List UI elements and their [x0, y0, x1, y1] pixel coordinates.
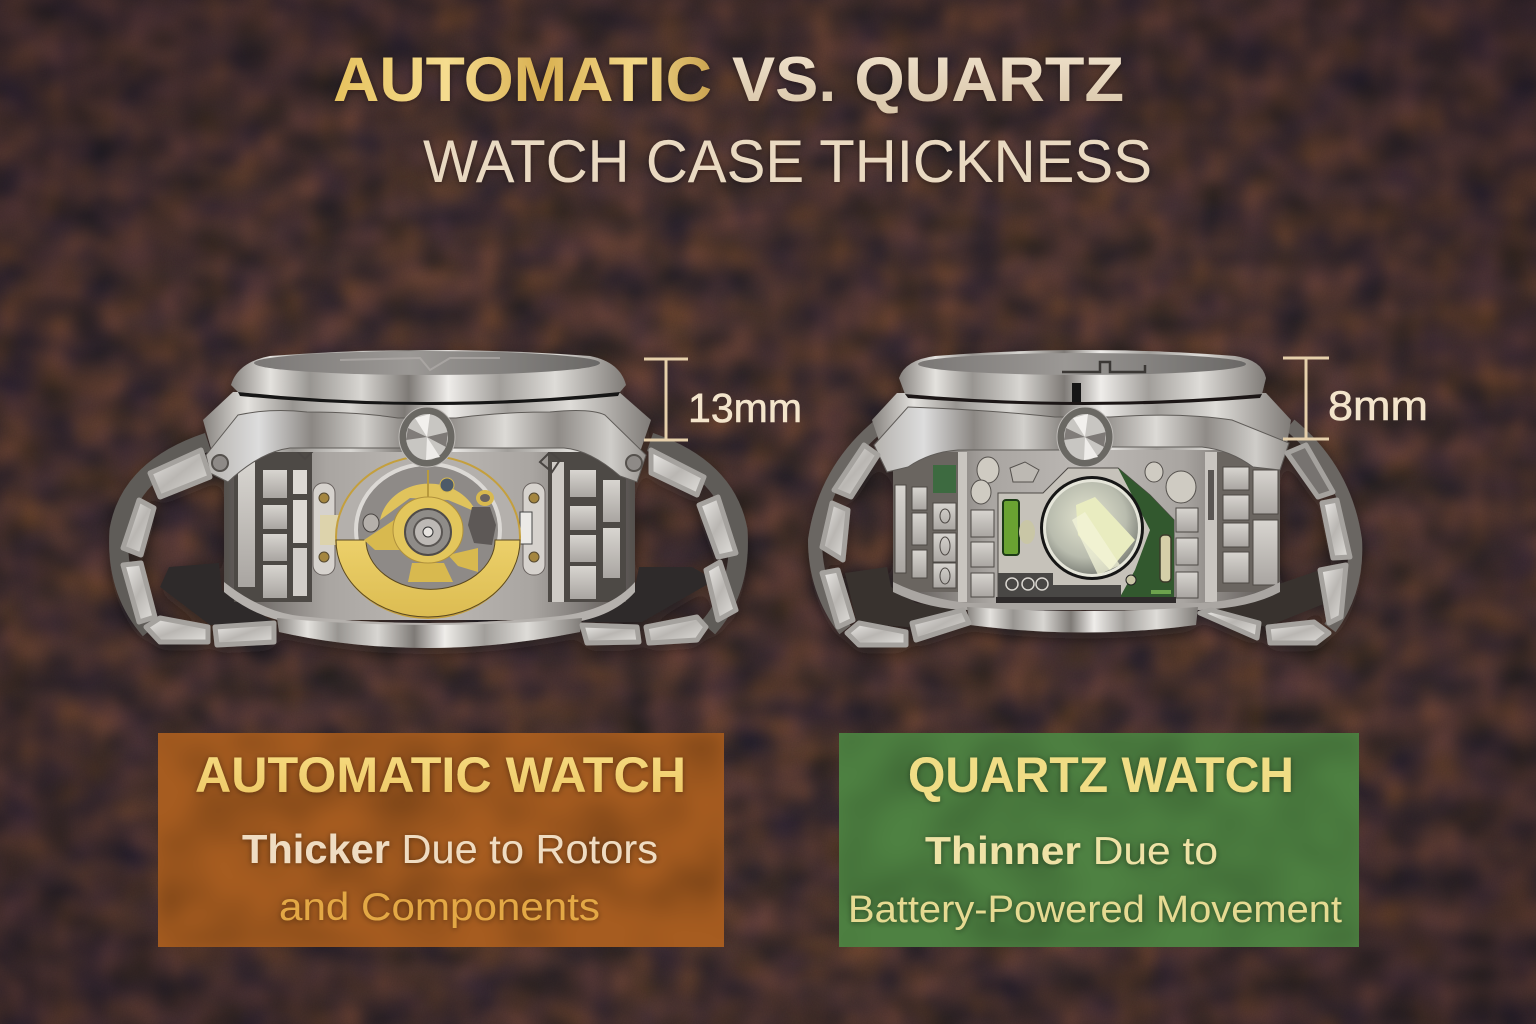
case body [224, 447, 635, 620]
central hub [393, 497, 463, 563]
right tiles [1176, 467, 1278, 598]
case base plate [277, 618, 582, 648]
small green board patch [933, 465, 956, 493]
lug bar [874, 407, 1289, 472]
illustration: automatic watch cutaway [119, 350, 738, 648]
label: 8mm: 8mm [1328, 382, 1428, 429]
title [333, 45, 1124, 115]
label: 13mm: 13mm [688, 385, 802, 431]
small capsule [1160, 535, 1171, 582]
panel: automatic watch [158, 733, 724, 947]
green capacitor [1003, 500, 1019, 555]
shoulder [203, 392, 651, 452]
gold rotor and automatic movement [336, 456, 520, 618]
subtitle: WATCH CASE THICKNESS [423, 128, 1152, 195]
vertical strips [958, 452, 1217, 602]
case base plate [967, 607, 1198, 632]
bracelet backing left [815, 425, 880, 630]
right column backing [548, 450, 626, 602]
left tile backing [893, 452, 958, 592]
right tile backing [1217, 452, 1280, 592]
dimension bracket: 13mm [644, 359, 688, 440]
bracelet backing left [119, 442, 208, 630]
panel: quartz watch [839, 733, 1359, 947]
bezel [899, 350, 1266, 405]
bracelet links right [582, 450, 736, 643]
crown [399, 407, 455, 467]
bridge plates with rivets [313, 483, 545, 575]
case back rim [893, 582, 1280, 610]
bracelet backing right [650, 442, 738, 628]
crown [1057, 407, 1113, 467]
bracelet links left [123, 450, 274, 645]
bracelet links left [822, 445, 969, 645]
title: AUTOMATIC [333, 45, 712, 115]
shoulder [872, 393, 1291, 450]
left tiles [895, 485, 994, 597]
upper components [971, 457, 1196, 504]
left columns [238, 443, 314, 598]
right columns [540, 452, 620, 602]
case body [893, 450, 1280, 607]
panel text: battery-powered movement: Battery-Powered Movement [848, 889, 1342, 931]
title: VS. QUARTZ [732, 45, 1124, 115]
panel text: thicker: Thicker Due to Rotors [242, 826, 658, 872]
panel heading: quartz watch: QUARTZ WATCH [908, 747, 1294, 803]
case back rim and base [224, 582, 635, 632]
panel heading: automatic watch: AUTOMATIC WATCH [195, 747, 686, 803]
dark strap right [1207, 570, 1341, 627]
dark strap left [845, 567, 963, 627]
bracelet links right [1200, 445, 1350, 643]
left column backing [234, 450, 312, 602]
dark strap left [160, 563, 274, 625]
battery [1040, 476, 1144, 580]
panel text: and components: and Components [279, 886, 600, 929]
dark strap right [582, 567, 715, 622]
bracelet backing right [1290, 425, 1355, 628]
bezel [231, 350, 626, 405]
panel text: thinner: Thinner Due to [925, 830, 1218, 873]
dimension bracket: 8mm [1283, 358, 1329, 439]
illustration: quartz watch cutaway [815, 350, 1355, 645]
lug bar [206, 411, 646, 482]
circuit board [996, 468, 1176, 604]
